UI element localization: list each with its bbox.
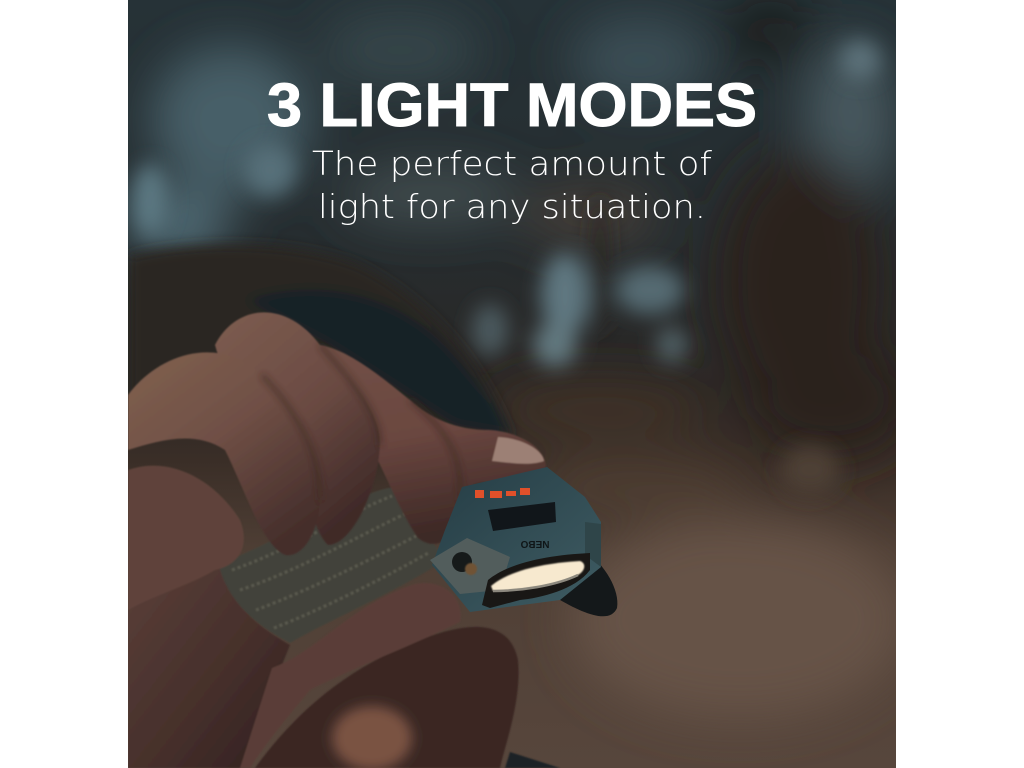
mode button — [488, 502, 556, 531]
finger: pinky — [128, 466, 244, 610]
hand and face — [128, 312, 560, 768]
face — [255, 627, 519, 768]
palm — [128, 562, 290, 768]
subtitle: The perfect amount of — [312, 144, 712, 183]
finger: ring — [128, 352, 320, 555]
finger: middle — [215, 312, 380, 545]
LED housing — [482, 553, 590, 608]
thumb — [240, 583, 461, 768]
LED light — [491, 561, 584, 591]
fingernail — [492, 437, 544, 464]
finger: index — [320, 345, 546, 544]
subtitle: light for any situation. — [318, 187, 706, 226]
subtitle — [312, 144, 712, 226]
cap brim: knit texture — [218, 487, 445, 643]
battery indicators — [475, 488, 530, 498]
side button — [452, 552, 472, 572]
brand label: NEBO — [520, 538, 549, 549]
finger creases — [262, 345, 460, 500]
headlamp — [430, 467, 617, 616]
white side margins — [0, 0, 128, 768]
title: 3 LIGHT MODES — [267, 71, 757, 139]
rear clip — [560, 566, 618, 616]
lamp body — [432, 467, 601, 612]
photo background: blurred forest — [128, 0, 915, 768]
cap (dark, out of focus) — [128, 237, 516, 434]
